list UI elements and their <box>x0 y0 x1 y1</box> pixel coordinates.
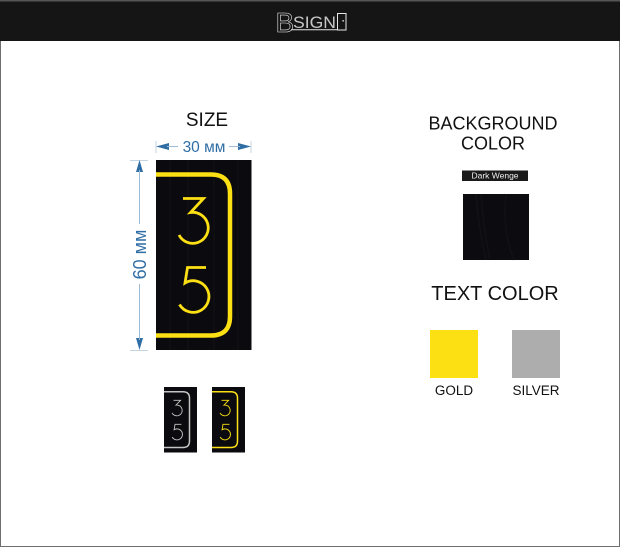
dimension: height 60 mm <box>130 160 150 350</box>
heading: text color: TEXT COLOR <box>431 283 559 305</box>
label: silver: SILVER <box>512 383 560 398</box>
main sign with gold number 35 <box>156 160 252 350</box>
thumbnail: silver variant <box>164 387 197 452</box>
logo: BSIGN: SIGN <box>293 13 336 32</box>
thumbnail: gold variant <box>212 387 245 452</box>
heading: size: SIZE <box>186 110 228 131</box>
digit 5 <box>180 268 209 312</box>
label: dark wenge <box>462 170 528 181</box>
gold frame <box>156 174 230 336</box>
swatch: gold <box>430 330 478 378</box>
digit 3 <box>179 198 208 243</box>
dimension: width 30 mm: 30 мм <box>183 139 225 156</box>
heading: background color: COLOR <box>461 134 525 154</box>
label: gold: GOLD <box>435 383 473 398</box>
dimension: height 60 mm: 60 мм <box>130 230 150 279</box>
swatch: dark wenge wood <box>463 194 529 260</box>
heading: background color: BACKGROUND <box>428 114 558 134</box>
header bar <box>0 0 620 41</box>
swatch: silver <box>512 330 560 378</box>
logo: BSIGN: B <box>276 7 294 38</box>
label: dark wenge: Dark Wenge <box>471 170 519 180</box>
dimension: width 30 mm <box>156 139 251 156</box>
logo: BSIGN <box>276 7 346 38</box>
heading: background color <box>428 114 558 154</box>
